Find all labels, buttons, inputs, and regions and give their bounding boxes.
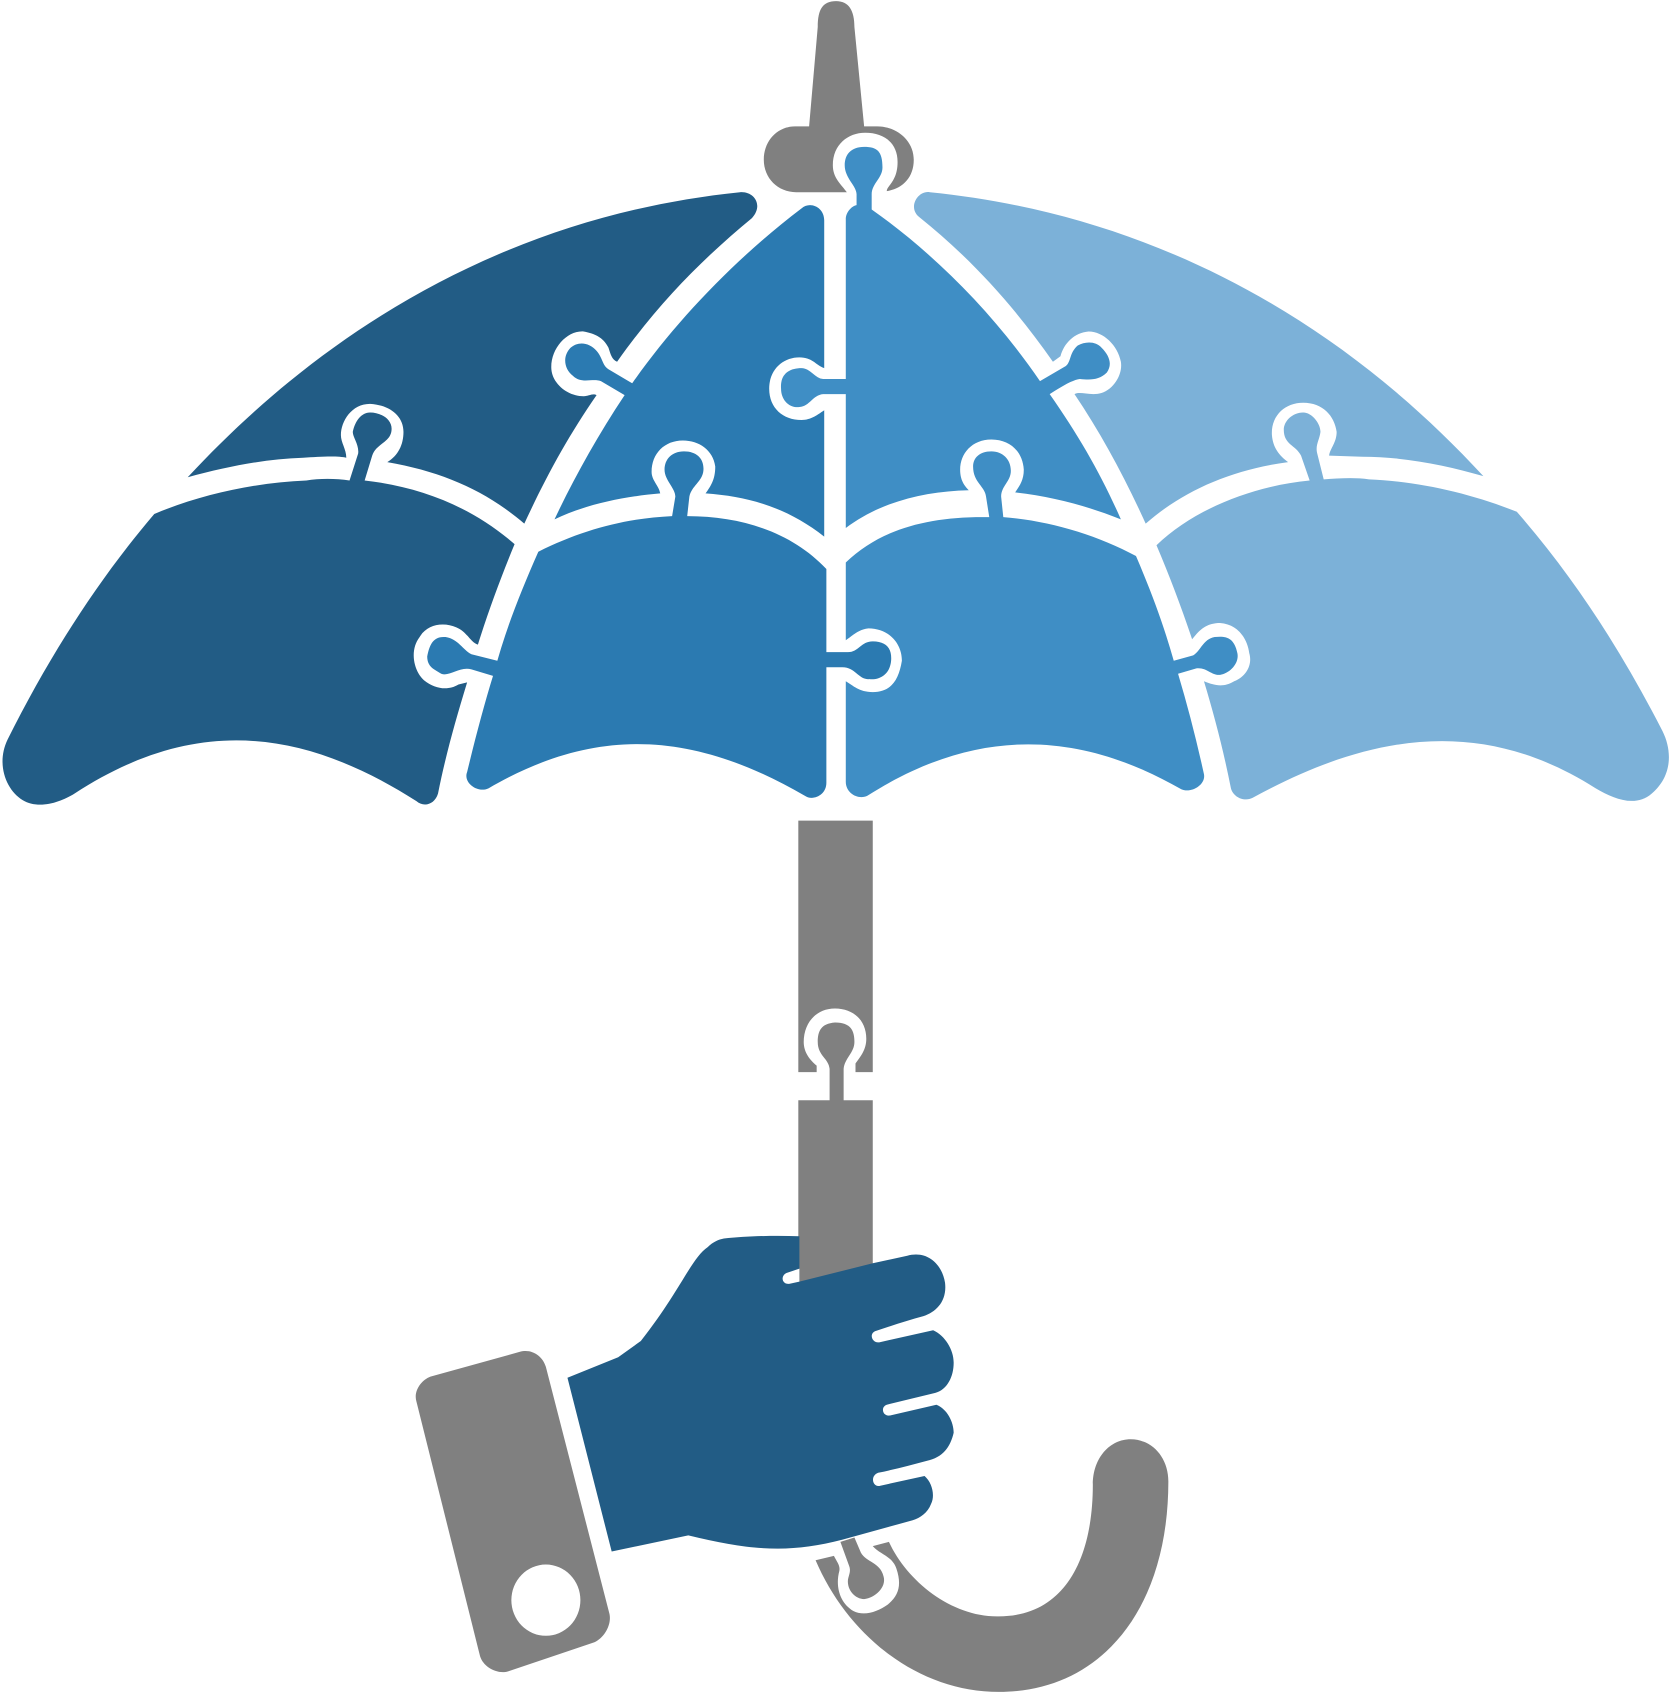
canopy panel: middle left top <box>555 205 824 537</box>
canopy panel: middle right bottom <box>846 451 1238 797</box>
hook puzzle tab <box>840 1538 884 1599</box>
canopy panel: middle left bottom <box>427 451 891 798</box>
canopy panel: dark left bottom <box>3 412 515 805</box>
umbrella shaft: lower segment <box>798 1022 873 1290</box>
umbrella top ferrule <box>764 1 914 192</box>
umbrella curved hook handle <box>816 1439 1168 1692</box>
umbrella shaft: upper segment <box>798 821 873 1072</box>
canopy panel: middle right top <box>781 147 1121 528</box>
canopy panel: light right top <box>914 192 1483 524</box>
shirt cuff with button hole <box>416 1351 610 1672</box>
canopy panel: dark left top <box>188 192 757 524</box>
hand gripping the handle <box>567 1236 954 1552</box>
canopy panel: light right bottom <box>1156 412 1669 801</box>
